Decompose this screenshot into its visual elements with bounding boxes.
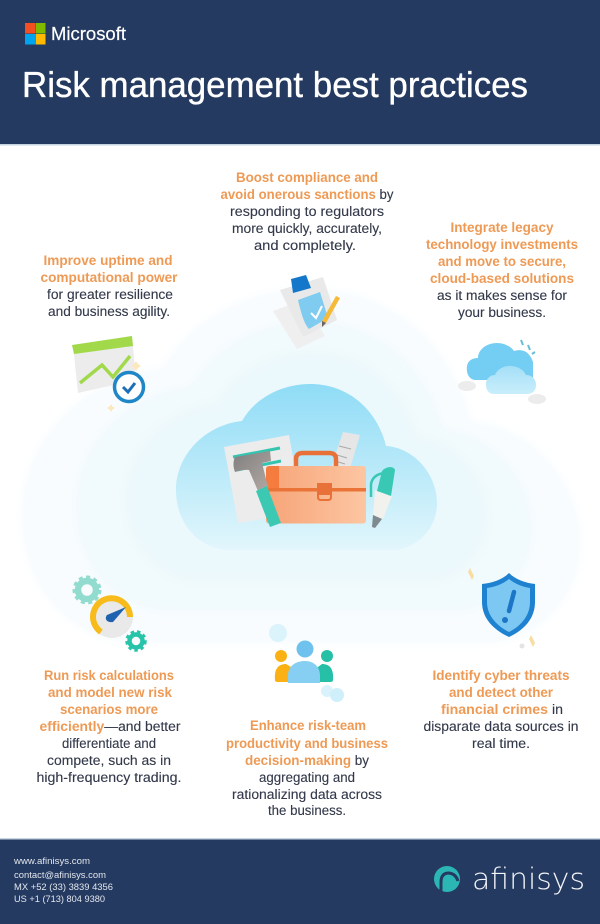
text block: boost compliance — [220, 170, 394, 253]
pen — [371, 467, 395, 528]
icon: shield with exclamation — [468, 568, 535, 648]
hammer — [234, 451, 281, 527]
icon: team of people — [269, 624, 344, 702]
icon: growth chart with check — [72, 336, 144, 412]
text block: risk calculations: and model new risk — [48, 685, 173, 700]
text block: boost compliance: and completely. — [254, 238, 356, 253]
text block: team productivity: rationalizing data across — [232, 787, 382, 802]
text block: integrate legacy: as it makes sense for — [437, 288, 568, 303]
text block: boost compliance: avoid onerous sanctions by — [220, 187, 394, 202]
text block: integrate legacy: Integrate legacy — [450, 220, 554, 235]
text block: integrate legacy: technology investments — [426, 237, 578, 252]
text block: cyber threats: Identify cyber threats — [432, 668, 570, 683]
text block: team productivity: aggregating and — [259, 770, 355, 785]
briefcase — [266, 453, 366, 524]
icon: speedometer with gears — [74, 577, 146, 650]
text block: cyber threats — [424, 668, 578, 751]
contact details: US +1 (713) 804 9380 — [14, 894, 105, 904]
Microsoft wordmark: Microsoft — [51, 23, 126, 44]
text block: integrate legacy: and move to secure, — [438, 254, 566, 269]
text block: improve uptime: and business agility. — [48, 304, 170, 319]
text block: team productivity: Enhance risk-team — [250, 718, 366, 733]
text block: risk calculations: compete, such as in — [47, 753, 171, 768]
text block: improve uptime: Improve uptime and — [44, 253, 172, 268]
contact details — [13, 856, 113, 904]
header band — [0, 0, 600, 146]
text block: boost compliance: responding to regulators — [230, 204, 384, 219]
central cloud illustration — [176, 384, 437, 550]
afinisys wordmark: afinisys — [472, 862, 585, 896]
icon: clouds — [458, 340, 546, 404]
document with lines — [224, 435, 303, 523]
title: Risk management best practices — [22, 64, 528, 105]
text block: improve uptime: for greater resilience — [47, 287, 173, 302]
text block: risk calculations: differentiate and — [62, 736, 156, 751]
text block: improve uptime: computational power — [40, 270, 178, 285]
text block: boost compliance: more quickly, accurately, — [232, 221, 382, 236]
text block: team productivity: the business. — [268, 803, 346, 818]
text block: improve uptime — [40, 253, 178, 319]
receipt — [331, 432, 360, 472]
text block: team productivity: decision-making by — [245, 753, 369, 768]
text block: cyber threats: and detect other — [449, 685, 554, 700]
text block: cyber threats: disparate data sources in — [424, 719, 578, 734]
text block: team productivity: productivity and business — [226, 736, 388, 751]
text block: integrate legacy — [426, 220, 578, 320]
text block: integrate legacy: your business. — [458, 305, 546, 320]
text block: cyber threats: real time. — [472, 736, 530, 751]
text block: risk calculations — [36, 668, 182, 785]
background halo clouds — [20, 287, 582, 644]
contact details: contact@afinisys.com — [14, 870, 106, 880]
icon: compliance clipboard with shield — [273, 275, 340, 349]
text block: risk calculations: Run risk calculations — [44, 668, 174, 683]
text block: cyber threats: financial crimes in — [441, 702, 563, 717]
icon: Microsoft logo — [25, 23, 46, 44]
text block: risk calculations: efficiently—and better — [40, 719, 181, 734]
text block: boost compliance: Boost compliance and — [236, 170, 378, 185]
contact details: MX +52 (33) 3839 4356 — [14, 882, 113, 892]
icon: afinisys mark — [434, 866, 460, 893]
text block: integrate legacy: cloud-based solutions — [430, 271, 574, 286]
text block: risk calculations: scenarios more — [60, 702, 158, 717]
text block: team productivity — [226, 718, 388, 818]
text block: risk calculations: high-frequency trading. — [36, 770, 182, 785]
footer band — [0, 838, 600, 924]
contact details: www.afinisys.com — [13, 856, 90, 866]
central cloud shape — [176, 384, 437, 550]
